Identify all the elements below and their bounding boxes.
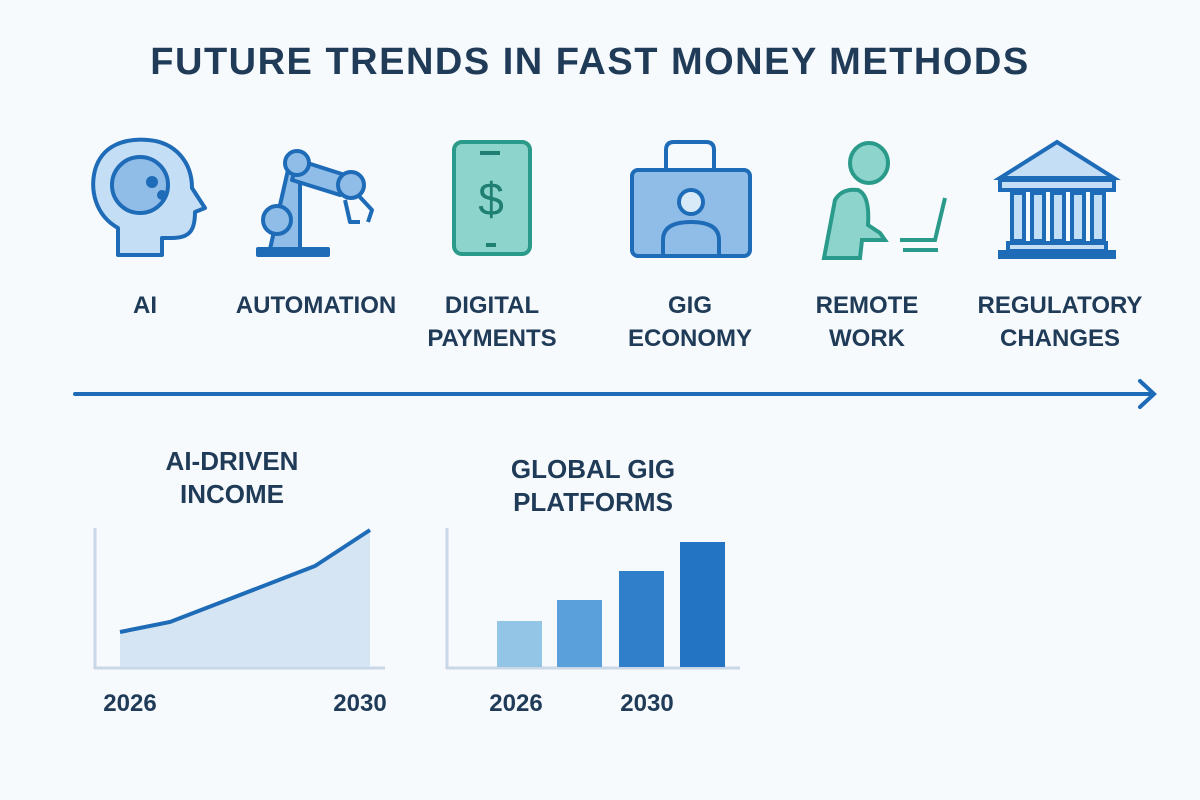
labels: ECONOMY: [628, 325, 752, 352]
labels: REGULATORY: [978, 292, 1142, 319]
icon: remote worker: [824, 143, 945, 258]
chart: AI-driven income: [95, 446, 387, 717]
chart: global gig platforms: 2030: [620, 690, 674, 717]
icon: phone with dollar: $: [478, 173, 504, 225]
labels: PAYMENTS: [427, 325, 557, 352]
title: FUTURE TRENDS IN FAST MONEY METHODS: [150, 41, 1030, 83]
icon: AI head: [93, 140, 205, 255]
labels: AUTOMATION: [236, 292, 396, 319]
labels: DIGITAL: [445, 292, 539, 319]
chart: global gig platforms: [447, 454, 740, 717]
labels: GIG: [668, 292, 712, 319]
labels: WORK: [829, 325, 906, 352]
chart: global gig platforms: 2026: [489, 690, 543, 717]
chart: AI-driven income: AI-DRIVEN: [166, 446, 298, 476]
icon: phone with dollar: [454, 142, 530, 254]
chart: global gig platforms: GLOBAL GIG: [511, 454, 675, 484]
labels: CHANGES: [1000, 325, 1120, 352]
chart: AI-driven income: 2030: [333, 690, 387, 717]
labels: REMOTE: [816, 292, 918, 319]
chart: global gig platforms: PLATFORMS: [513, 487, 673, 517]
icon: briefcase with person: [632, 142, 750, 256]
labels: AI: [133, 292, 157, 319]
icon: bank building: [1000, 142, 1114, 257]
labels: [133, 292, 1142, 352]
chart: AI-driven income: 2026: [103, 690, 157, 717]
arrow: timeline: [75, 381, 1154, 407]
chart: AI-driven income: INCOME: [180, 479, 284, 509]
icon: robot arm: [258, 151, 372, 255]
